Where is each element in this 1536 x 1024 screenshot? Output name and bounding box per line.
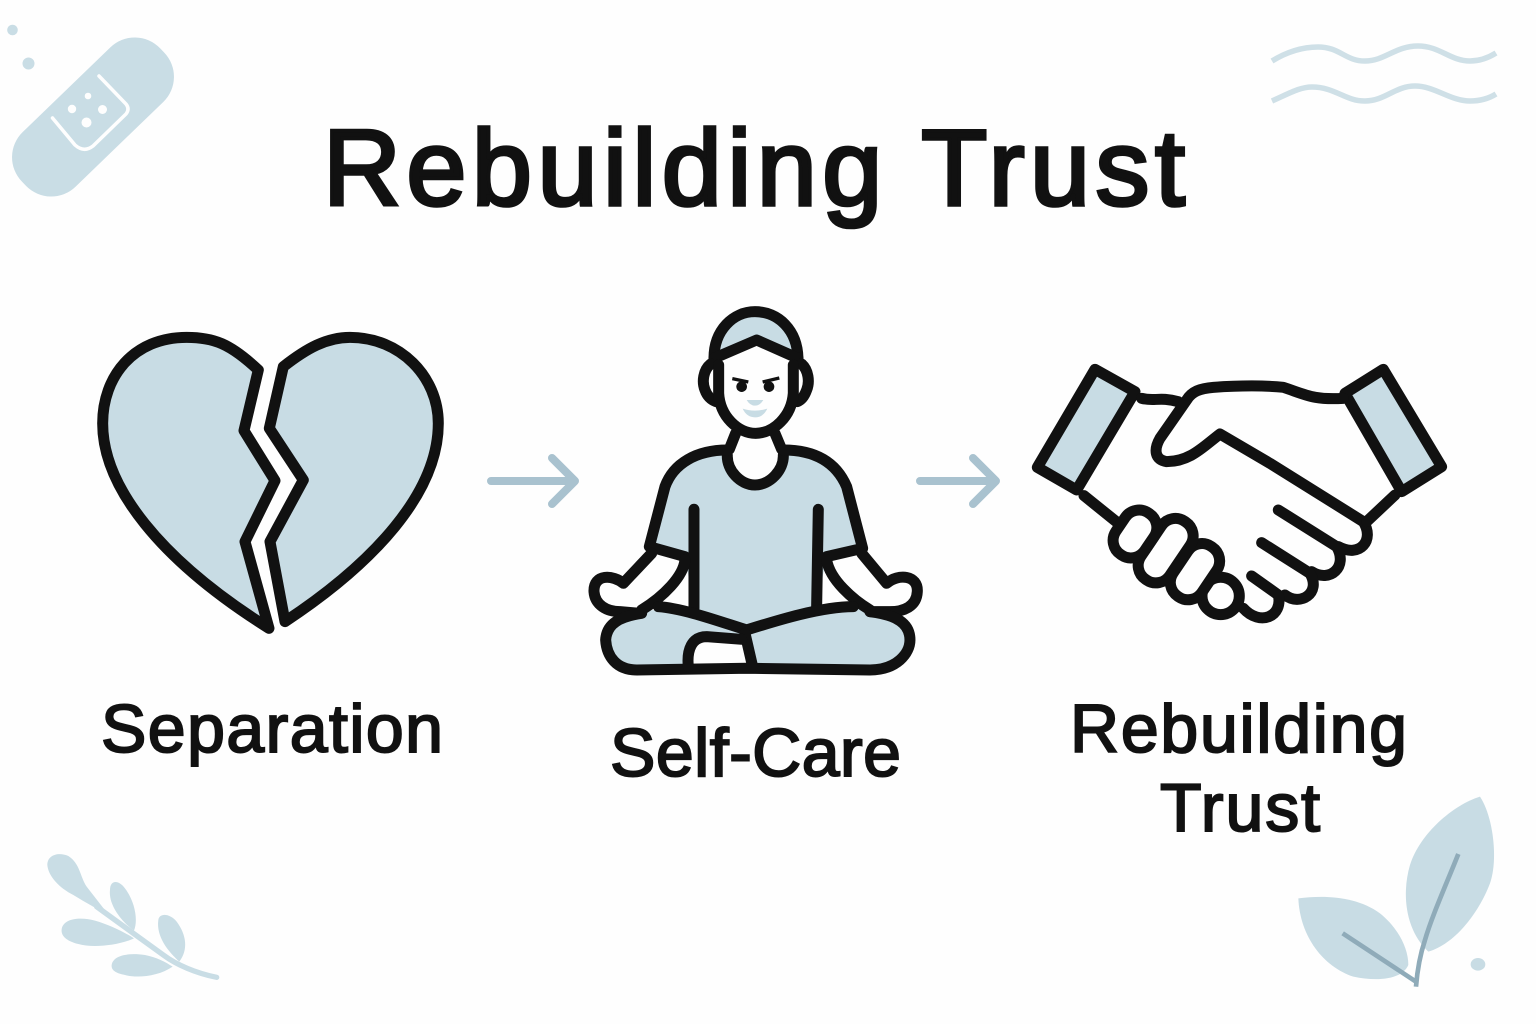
icon: handshake [1037, 368, 1442, 618]
label: self-care: Self-Care [610, 715, 901, 791]
hair and face lines [714, 312, 798, 358]
decoration: bandage [0, 23, 188, 211]
label: rebuilding trust: Rebuilding [1070, 691, 1407, 767]
shirt fill [650, 452, 863, 628]
hair fill [714, 312, 797, 357]
label: separation: Separation [101, 691, 443, 767]
arrow: separation to self-care [491, 458, 575, 504]
legs fill [606, 607, 908, 670]
decoration: waves [1272, 46, 1496, 101]
icon: broken heart [103, 337, 438, 628]
title: Rebuilding Trust [323, 107, 1185, 228]
label: rebuilding trust [1070, 691, 1407, 846]
neck opening [727, 447, 783, 485]
icon: meditating person [594, 312, 917, 670]
shirt lines [727, 455, 783, 485]
decoration: leaves [1298, 797, 1494, 987]
legs lines [606, 612, 910, 670]
label: rebuilding trust: Trust [1160, 770, 1320, 846]
arrow: self-care to rebuilding trust [920, 458, 996, 504]
arms and hands [594, 553, 652, 613]
decoration: sprig [47, 854, 217, 977]
